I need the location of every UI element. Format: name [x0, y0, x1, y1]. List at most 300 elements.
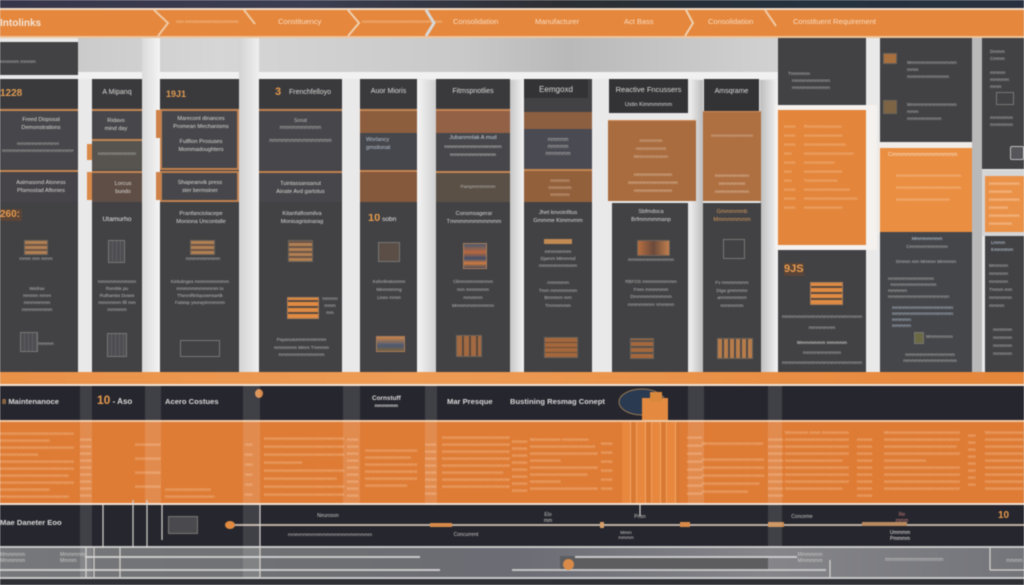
- grey band rail lower: [0, 569, 440, 571]
- column 6 text: Mmmmmmmmmmm: [452, 303, 494, 308]
- column 6 lower panel: [436, 171, 510, 202]
- column 6 mid text: mmmmmmmmmmmm: [450, 152, 496, 157]
- table numbers 7: mmmm: [687, 475, 702, 480]
- tower oval icon: [612, 386, 678, 422]
- column 8 heading: Ustin Kimmmmmm: [625, 102, 672, 108]
- table text 7: mmmmmmmmmmmmmmm: [530, 472, 587, 477]
- column 3 lower text: [178, 179, 222, 194]
- right column B lower panel: [880, 232, 972, 372]
- table numbers 5: mmmm: [512, 439, 527, 444]
- column 4 chart icon: [287, 297, 319, 319]
- right column C text: Dmmm: [990, 49, 1005, 54]
- grey vertical gap strip 2: [239, 38, 259, 372]
- right column A footer: [780, 338, 864, 368]
- column 2: [92, 79, 142, 372]
- orange card text: mmmmmmmmmmmm: [804, 187, 850, 192]
- column 5 upper panel: [360, 109, 417, 133]
- right column B text B: mmm: [907, 109, 918, 114]
- column 3 orange left tab lower: [156, 172, 160, 200]
- column 6 body heading: Tmmmmmmmmmmm: [447, 218, 501, 224]
- column 3 upper note: Mommadoughters: [178, 146, 224, 152]
- column 4: [259, 79, 342, 372]
- band label 5: Mar Presque: [447, 397, 493, 406]
- table numbers 6: mmm: [601, 486, 612, 491]
- chevron 3: [346, 9, 361, 37]
- right column B text B: Mmmmmmmmmmmmm: [907, 102, 957, 107]
- column 3 upper text: Marecont dinances: [177, 116, 225, 122]
- column 1 heading: 1228: [0, 88, 22, 99]
- table numbers 1: mmm: [80, 437, 91, 442]
- right column B lower footer: mmmmmmmmmmmmm: [905, 352, 955, 357]
- right column B lower text: Smmm mm Mmmm Mmmmm: [896, 259, 956, 264]
- column 6 upper panel: [436, 109, 510, 133]
- column 8 body heading: Sbfmdoca: [638, 209, 664, 215]
- column 2 tag text: [114, 180, 132, 194]
- grey band label 2: Mmmm: [60, 558, 77, 564]
- column 7 heading: [524, 79, 588, 98]
- right column B lower footer: [894, 352, 966, 364]
- column 2 tag panel: [92, 171, 142, 202]
- column 8 body heading: [630, 208, 672, 222]
- step label 8: Constituent Requirement: [793, 17, 876, 26]
- right column A note: mmmmmmm: [809, 325, 835, 330]
- column 2 lower text: mmmmmmmmmm: [98, 151, 136, 156]
- table text 2: mmmmmmm: [135, 470, 161, 475]
- table text 8: [702, 440, 764, 496]
- table text 2: mmmmmmm: [135, 484, 161, 489]
- right column C notes: [990, 114, 1024, 128]
- grey band label 2: [60, 552, 84, 564]
- timeline label F: mmm: [896, 518, 908, 524]
- right column C notes: mmmmmm: [990, 115, 1013, 120]
- column 1 text: mmmmmmmm: [22, 307, 52, 312]
- column 9 heading: Amsqrame: [715, 88, 748, 95]
- timeline start node: [225, 521, 235, 529]
- orange card labels: mmm: [784, 124, 795, 129]
- column 4 number: 3: [275, 86, 281, 98]
- table numbers 1: mmm: [80, 465, 91, 470]
- timeline label F: Re: [899, 512, 905, 518]
- timeline band: [0, 505, 1024, 546]
- table numbers 6: mmm: [601, 450, 612, 455]
- timeline node 6: [862, 522, 907, 526]
- column 4 heading: Frenchfelloyo: [289, 89, 331, 96]
- grey banner behind columns: [78, 38, 778, 72]
- table numbers 8: mmmm: [768, 458, 783, 463]
- column 2 heading: A Mipanq: [102, 89, 132, 96]
- orange divider band: [0, 372, 1024, 386]
- translucent vertical overlay 5: [425, 386, 437, 505]
- orange card text: mmmmmmmm: [989, 213, 1020, 218]
- grey vertical gap strip 5: [692, 80, 703, 372]
- table text 9: mmmmmmmmmmmmmmm: [785, 486, 842, 491]
- column 7 heading: Eemgoxd: [539, 85, 573, 94]
- step label 3: mmmmmmmmmmmmmmmmmmmmm: [362, 19, 442, 24]
- column 5 icon B: [376, 336, 405, 352]
- column 2 text: Ruthaniss Doses: [100, 293, 134, 298]
- table numbers 9: mmmm: [857, 486, 872, 491]
- timeline node 5: [768, 522, 784, 527]
- orange card text: mmmmmm: [989, 189, 1012, 194]
- timeline note B: Concurrent: [454, 532, 478, 538]
- column 9 icon B: [717, 338, 753, 359]
- table text 10: mmmmmmmmmmm: [884, 458, 926, 463]
- right column C lower list: mmmm: [989, 303, 1004, 308]
- timeline note D: mmmm: [618, 535, 634, 540]
- table text 8: mmmmmmmmmmmm: [702, 489, 748, 494]
- column 8 text: mmmmmmm Vmmmm: [628, 302, 674, 306]
- right column B lower heading: Mmmmmmmm: [912, 236, 942, 241]
- column 9 text: Fv mmmmmmm: [715, 280, 749, 285]
- grey vertical gap strips: [142, 38, 160, 372]
- table text 8: Mmmmmmmmmmmmmmmm: [702, 441, 763, 446]
- right column B lower list: mmmmmmmmmmmmmmmm: [892, 311, 953, 316]
- table text 3: [165, 486, 215, 500]
- table numbers 5: mmmm: [512, 453, 527, 458]
- right column C lower footer: mmmmm: [993, 327, 1012, 332]
- timeline label A: Neuroson: [317, 513, 339, 519]
- column 8 text: Fmm mmmmmm: [634, 286, 668, 292]
- column 7 mid panel: [524, 129, 592, 169]
- column 7 mid text: mmmmm: [548, 137, 568, 143]
- column 4 chart note: mmmm: [322, 296, 338, 301]
- table numbers 9: mmmm: [857, 493, 872, 498]
- timeline rail: [232, 524, 1024, 526]
- column 4 icon A: [288, 240, 313, 262]
- grey band rail upper right: [575, 556, 797, 558]
- right column C top panel: [982, 38, 1024, 169]
- column 2 upper panel: [92, 109, 142, 139]
- table numbers 7: mmmm: [687, 435, 702, 440]
- column 9 orange panel: [703, 111, 761, 201]
- column 7 lower text: mmmmm: [550, 192, 570, 197]
- orange card labels: mm: [784, 151, 792, 156]
- column 3 lower text: ster bermsiner: [182, 188, 218, 194]
- column 7 icon caption: mmmmmmmmmm: [539, 263, 577, 268]
- grey vertical gap strip 6: [760, 80, 778, 372]
- right column B text A: Mmmmmmmmmmmmm: [907, 60, 957, 65]
- table text 2: mmmmmmm: [135, 442, 161, 447]
- table column 1: mmmmmmmmmmmmmmmmmm: [0, 494, 69, 499]
- orange card text: Rmmmmmmmmm: [804, 124, 842, 129]
- column 4 heading: [259, 79, 342, 108]
- table text 5: mmmmmmmmmmmm: [365, 455, 411, 460]
- column 7 text: Tmmmmmm: [545, 302, 571, 308]
- table numbers 3: mmm: [347, 486, 358, 491]
- table numbers 6: mmm: [601, 477, 612, 482]
- grey band label 1: Mmmmmm: [0, 552, 25, 558]
- table numbers 1: mmm: [80, 458, 91, 463]
- column 1 upper text: Freed Disposal: [22, 117, 60, 123]
- column 6 text: mm mmmmmm: [457, 287, 489, 292]
- table numbers 8: mmmm: [768, 493, 783, 498]
- column 2 orange tabs: [87, 144, 92, 160]
- right column A top panel: [778, 38, 866, 105]
- column 1 body heading: 260:: [0, 209, 20, 220]
- table numbers 4: mmm: [425, 456, 436, 461]
- orange card labels: mmm: [784, 160, 795, 165]
- column 9 body heading: Gmmmmmb: [717, 209, 747, 215]
- column 4 upper note: mmmmmmmmmmmmmmm: [269, 138, 332, 144]
- table numbers 1: mmm: [80, 472, 91, 477]
- timeline label C: [538, 512, 558, 524]
- table numbers 5: mmmm: [512, 481, 527, 486]
- right column A top text: [788, 70, 850, 91]
- column 2 icon B: [107, 333, 127, 357]
- table numbers 3: mmm: [347, 437, 358, 442]
- table numbers 8: mmmm: [768, 479, 783, 484]
- right column B lower note: mmmmmmmmmmmm: [888, 276, 934, 281]
- column 1 text: mmmmmmm: [24, 300, 50, 305]
- table text 7: [530, 436, 598, 492]
- table numbers 6: mmm: [601, 441, 612, 446]
- right column B lower note: mmmmmmmmmmmmmmmm: [888, 294, 949, 299]
- right column B lower note: mmmmmmmmmmmm: [891, 282, 936, 287]
- left top panel: [0, 42, 78, 75]
- column 6 text: Climmmmmmmmm: [453, 279, 493, 284]
- table numbers 8: mmmm: [768, 472, 783, 477]
- right column B icon A: [883, 53, 897, 64]
- orange card text: mmmmmmmmmm: [804, 133, 842, 138]
- table text 9: [785, 429, 849, 492]
- table text 11: mmmmmmmmmm: [985, 458, 1023, 463]
- band label 6: Bustining Resmag Conept: [510, 397, 605, 406]
- column 8 orange panel: [608, 120, 696, 201]
- column 4 text: [274, 337, 330, 357]
- timeline node 3: [600, 522, 604, 528]
- column 9 text: mmmmmm: [721, 302, 743, 308]
- table numbers 4: mmm: [425, 484, 436, 489]
- column 3 text: Theoniftinlquownsartik: [177, 293, 223, 298]
- column 1 middle panel: [0, 170, 78, 202]
- table text 11: mmmmmmmmmm: [985, 465, 1023, 470]
- table numbers 5: mmmm: [512, 488, 527, 493]
- column 8 orange text: [634, 138, 668, 159]
- column 4 lower text: [276, 180, 325, 194]
- table numbers 8: mmmm: [768, 444, 783, 449]
- column 8 heading: Reactive Fncussers: [616, 85, 681, 94]
- right column C lower list: mmmmm: [989, 279, 1008, 284]
- right column C lower text: Lmmm: [991, 240, 1005, 245]
- table numbers 10: mm: [968, 482, 976, 487]
- table text 11: mmmmmmmmmm: [985, 472, 1023, 477]
- column 8 text: [625, 279, 677, 306]
- column 3 text: Kinlutinges mmmmmmmmm: [171, 279, 229, 284]
- orange card labels: mm: [784, 169, 792, 174]
- table numbers 2: [245, 440, 255, 500]
- column 4 body heading: [280, 210, 324, 224]
- right column C lower text: Kmmmmm: [991, 247, 1013, 252]
- table numbers 9: mmmm: [857, 437, 872, 442]
- band label 4: Cornstuff: [372, 395, 401, 402]
- grey band label 1: Mmmmmm: [0, 558, 25, 564]
- orange card text: mmmmmmmmmmmmmm: [896, 197, 950, 202]
- right column A top text: mmmmmmmmmm: [792, 85, 830, 90]
- grey band rail lower right: [512, 569, 826, 571]
- orange card text: mmmmmmmmmmm: [804, 142, 846, 147]
- right column B top panel: [880, 38, 972, 142]
- column 5 heading: Auor Mioris: [371, 88, 406, 95]
- header title: Intolinks: [0, 18, 41, 29]
- column 7 mid text: mmmmmm: [546, 151, 570, 157]
- column 1 upper text: [21, 116, 61, 130]
- column 4 upper text: mmmmmmmmmm: [280, 125, 321, 131]
- grey band label 3: [795, 552, 825, 564]
- orange card text: mmmmmmmmmmmmm: [804, 151, 854, 156]
- orange card labels: mmm: [784, 205, 795, 210]
- column 9 body heading: [707, 209, 757, 224]
- right column C text: mmmm: [990, 70, 1005, 75]
- table numbers 9: mmmm: [857, 444, 872, 449]
- table numbers 2: mm: [245, 442, 253, 447]
- table numbers 8: mmmm: [768, 486, 783, 491]
- table text 8: mmmmmmmmmmmmmmm: [702, 481, 759, 486]
- column 5 heading: [360, 79, 417, 108]
- timeline icon: [168, 516, 198, 534]
- table column 1: mmmmmmmmmmmmm: [0, 487, 50, 492]
- column 1 middle text: Pfamostad Aflonies: [17, 188, 65, 194]
- orange card text: mmmmmmmm: [989, 181, 1020, 186]
- right column C text: [990, 48, 1024, 90]
- orange card labels: mmm: [784, 133, 795, 138]
- table numbers 4: mmm: [425, 491, 436, 496]
- column 1 upper panel: [0, 109, 78, 169]
- band label 4: mmmmmm: [375, 403, 398, 408]
- translucent vertical overlay 3: [243, 386, 260, 579]
- column 3 icon A caption: mmmmmmmmm: [186, 256, 220, 261]
- orange card fill: [880, 148, 972, 232]
- column 7 text: [538, 280, 578, 308]
- column 5 text: Linev mmm: [377, 295, 401, 300]
- orange card labels: mmm: [784, 187, 795, 192]
- right column C lower footer: mmmmm: [993, 335, 1012, 340]
- right column B orange card: [878, 142, 974, 234]
- column 2 body heading: Utamurho: [103, 216, 131, 223]
- table numbers 1: mmm: [80, 444, 91, 449]
- right column B lower note: mmmmm: [888, 288, 907, 293]
- column 8 text: RBFOS mmmmmmmmm: [625, 279, 677, 284]
- translucent vertical overlay 2: [145, 386, 161, 505]
- column 1 upper note: [2, 141, 74, 153]
- column 4 text: Payanusonmmmmmmm: [277, 337, 326, 342]
- right column C lower list: Tmmm mm: [989, 287, 1012, 292]
- table text 7: mmmmmmmm: [530, 458, 561, 463]
- right column B text A: mmm: [907, 67, 918, 72]
- column 7 icon caption: [538, 249, 578, 268]
- translucent vertical overlay 4: [343, 386, 360, 505]
- chevron 6: [684, 10, 694, 36]
- table text 4: mmmmmmmmmmmmmmmmmmm: [264, 476, 337, 481]
- column 6 mid panel: [436, 133, 510, 170]
- table numbers 10: mm: [968, 440, 976, 445]
- right column C orange card: [982, 170, 1024, 236]
- column 2 upper text: mind day: [105, 126, 127, 132]
- table numbers 5: mmmm: [512, 474, 527, 479]
- table numbers 4: mmm: [425, 463, 436, 468]
- right column C text: mmm: [990, 84, 1001, 89]
- table numbers 10: [968, 432, 978, 488]
- grey gap beside right column C: [972, 38, 982, 372]
- column 3 upper text: Promean Mechanisms: [173, 124, 229, 130]
- column 3 text: Fatsisp ysoraytmmmmm: [175, 300, 225, 305]
- column 3 upper note: [178, 138, 224, 152]
- column 4 upper text: [279, 118, 322, 131]
- column 4 chart note: mmm: [324, 303, 336, 308]
- column 7 text: Tmm mmmmmmm: [539, 288, 577, 292]
- column 2 text: mmmmmm fill mm: [98, 300, 136, 305]
- column 9 orange note: [707, 172, 757, 196]
- column 7 icon B: [544, 337, 578, 358]
- column 6 heading: Fitmspnotlies: [452, 88, 494, 95]
- column 6 mid text: mmmmmmmmmmmmmmm: [444, 144, 502, 148]
- right column B lower title: Cmmmmmmmmmm: [906, 244, 948, 249]
- right column C lower list: Mmmmm: [989, 263, 1008, 268]
- table numbers 9: mmmm: [857, 458, 872, 463]
- orange table band: [0, 420, 1024, 505]
- table numbers 9: [857, 436, 875, 499]
- column 5 icon A: [378, 242, 400, 262]
- right column A orange card: [775, 105, 877, 250]
- table numbers 2: mm: [245, 452, 253, 457]
- right column B icon B: [883, 100, 897, 114]
- right column B lower list: mmmmm: [892, 317, 911, 322]
- top dark strip: [0, 0, 1024, 8]
- table numbers 10: mm: [968, 468, 976, 473]
- table numbers 4: mmm: [425, 470, 436, 475]
- dark label band: [0, 386, 1024, 420]
- column 5 mid text: [366, 136, 391, 150]
- right column B text B: [907, 101, 967, 122]
- right column C lower footer: mmmmm: [993, 343, 1012, 348]
- column 7 lower panel: [524, 169, 592, 202]
- table numbers 7: mmmm: [687, 443, 702, 448]
- right column B lower label: Mmmmmmm: [926, 334, 953, 339]
- right column B lower footer: mmmmmmmmmmmmmm: [903, 358, 957, 363]
- right column C text: mmmmm: [990, 77, 1009, 82]
- column 8 body heading: Brfmmmmmanp: [631, 216, 671, 222]
- column 4 body heading: Kitanfalfosmilva: [282, 211, 322, 217]
- table numbers 10: mm: [968, 433, 976, 438]
- table numbers 1: [80, 436, 94, 499]
- right column B lower list: [892, 305, 968, 329]
- column 3 body heading: Moniona Uncontalle: [176, 218, 226, 224]
- column 9 orange note: mmmmmmmmm: [715, 189, 749, 194]
- column 4 body heading: Monisagrisinarag: [281, 218, 323, 224]
- band label 2: 10 - Aso: [97, 393, 132, 407]
- right column B text A: mmmmmmmmmmm: [907, 74, 949, 79]
- table text 7: mmmmmmmm: [530, 479, 561, 484]
- column 3 icon A: [190, 240, 215, 255]
- column 9 icon A: [723, 239, 745, 259]
- right column A footer: Mmmmmmm mmmmm: [797, 340, 847, 345]
- table text 9: Mmmmmm mmm mmmmmmm: [785, 430, 849, 435]
- right column A text: mmmmmmmmmmmmmmmmmmmmm: [782, 314, 862, 319]
- column 9 text: ammmmmmm: [717, 295, 747, 300]
- left top panel text: mmmmm mmmm: [0, 59, 36, 64]
- right column A chart: [810, 282, 843, 305]
- right column B lower list: mmmmmmmmmmmmmmmm: [892, 305, 953, 310]
- table numbers 8: [768, 436, 784, 499]
- table numbers 10: mm: [968, 454, 976, 459]
- column 8 text: Dmmmmmmmmmm: [630, 294, 672, 299]
- table numbers 8: mmmm: [768, 465, 783, 470]
- column 7: [524, 79, 592, 372]
- table column 1: mmmmmmmmmmmmmmmmmm: [0, 473, 69, 478]
- column 8 orange note: mmmmmmmmmmmmm: [628, 180, 678, 185]
- table numbers 7: mmmm: [687, 491, 702, 496]
- orange card text: mmmmmmmmmmmmmm: [804, 196, 858, 201]
- table numbers 4: mmm: [425, 477, 436, 482]
